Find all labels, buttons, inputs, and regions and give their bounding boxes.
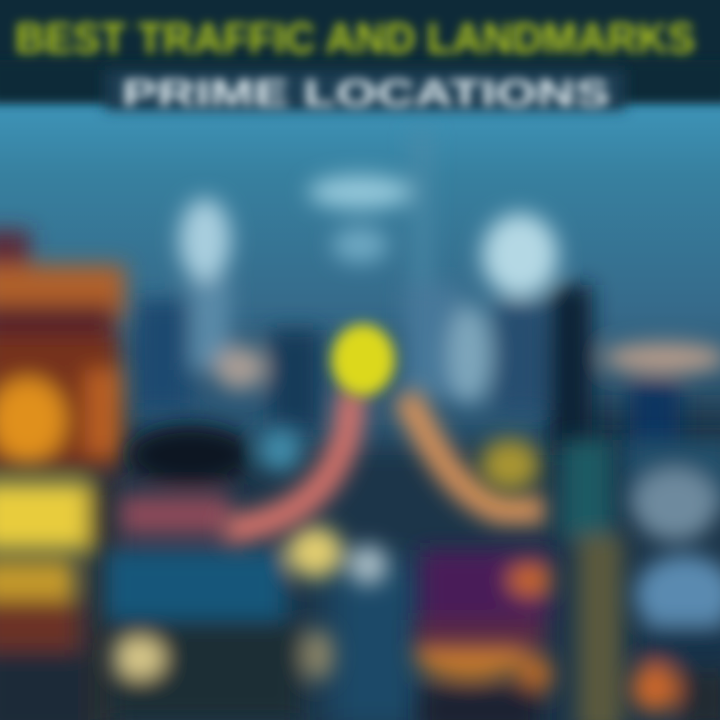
sky background — [0, 90, 720, 430]
cloud: central — [308, 175, 412, 209]
light trail: right — [405, 395, 545, 510]
left shopfront — [0, 230, 125, 720]
title line 1: BEST TRAFFIC AND LANDMARKS — [15, 14, 695, 63]
title band — [0, 0, 720, 110]
tower: central spire — [412, 130, 432, 310]
tower: pale left — [179, 198, 231, 282]
yellow sphere — [331, 324, 395, 396]
street left: vehicles — [105, 425, 388, 720]
tower: dark right — [550, 285, 592, 455]
street scene base — [0, 340, 720, 720]
tower: dark left — [135, 300, 190, 410]
tower: pale right — [482, 213, 558, 297]
building: distant right — [630, 380, 680, 460]
light trail: left — [225, 390, 352, 530]
street right: vehicles — [415, 439, 553, 720]
right vehicle — [625, 440, 720, 720]
city skyline — [135, 130, 720, 460]
title line 2: PRIME LOCATIONS — [122, 73, 610, 115]
lamp post — [562, 440, 622, 720]
